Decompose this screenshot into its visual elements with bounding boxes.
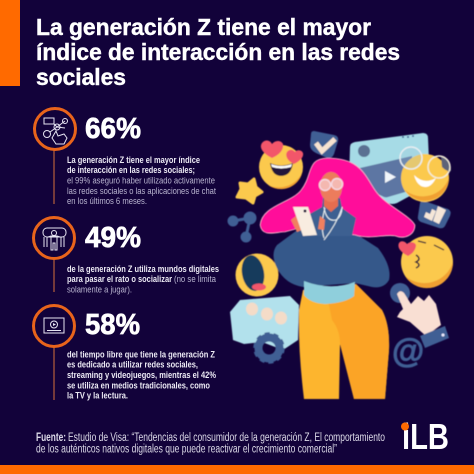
title: La generación Z tiene el mayor [36,14,371,40]
stat number: 49% [85,222,141,254]
icon: scream emoji [236,253,278,296]
figure: hair [260,158,415,237]
stat description: las redes sociales o las aplicaciones de chat [67,186,216,196]
figure: fanny pack [304,281,355,304]
figure: sweater [274,228,390,287]
title: índice de interacción en las redes [36,39,400,65]
panel: stat 58% [34,306,216,400]
icon: at sign: @ [392,332,424,369]
icon: kiss emoji [398,236,453,288]
icon: video player card [349,133,430,204]
figure: phone and hand [291,207,325,236]
stat description: en los últimos 6 meses. [67,196,147,206]
stat description: es dedicado a utilizar redes sociales, [67,360,198,370]
stat description: streaming y videojuegos, mientras el 42% [67,370,216,380]
icon: heart-eyes emoji [259,140,303,189]
stat description: La generación Z tiene el mayor índice [67,155,200,165]
illustration: woman with social media icons [228,131,453,399]
source note: de los auténticos nativos digitales que puede reactivar el crecimiento comercial” [36,444,337,456]
figure: torso and neck [308,198,356,236]
stat description: del tiempo libre que tiene la generación Z [67,350,215,360]
orange corner block [0,0,20,86]
icon: bar chart badge [418,201,451,228]
title [36,14,400,90]
stat description: solamente a jugar). [67,284,132,294]
stat description [67,264,219,294]
logo: iLB: iLB [402,416,449,457]
stat description [67,155,216,206]
panel: stat 66% [34,108,216,206]
stat number: 66% [85,113,141,145]
icon: people in virtual world [34,218,74,292]
stat description: (no se limita [174,274,216,284]
figure: pants [299,284,389,399]
stat description: para pasar el rato o socializar [67,274,172,284]
figure: necklace [322,207,342,240]
stat description: de la generación Z utiliza mundos digitales [67,264,219,274]
icon: social network hand [34,108,76,204]
source note: Fuente: [36,432,66,444]
icon: gear [255,334,283,362]
icon: pointing hand [390,283,449,348]
stat description: de interacción en las redes sociales; [67,165,195,175]
stat description [67,350,216,400]
panel: stat 49% [34,218,219,294]
icon: check badge [310,131,338,158]
figure: face [320,172,342,212]
stat description: el 99% aseguró haber utilizado activamente [67,176,215,186]
icon: molecule network [228,212,256,242]
icon: star [237,179,262,203]
source note [36,432,385,456]
icon: laughing glasses emoji [400,147,451,202]
stat description: la TV y la lectura. [67,390,128,400]
stat number: 58% [85,309,140,341]
stat description: se utiliza en medios tradicionales, como [67,380,210,390]
icon: video player screen [34,306,74,400]
icon: chat bubble [230,296,299,350]
title: sociales [36,64,126,90]
orange bottom band [0,465,474,474]
